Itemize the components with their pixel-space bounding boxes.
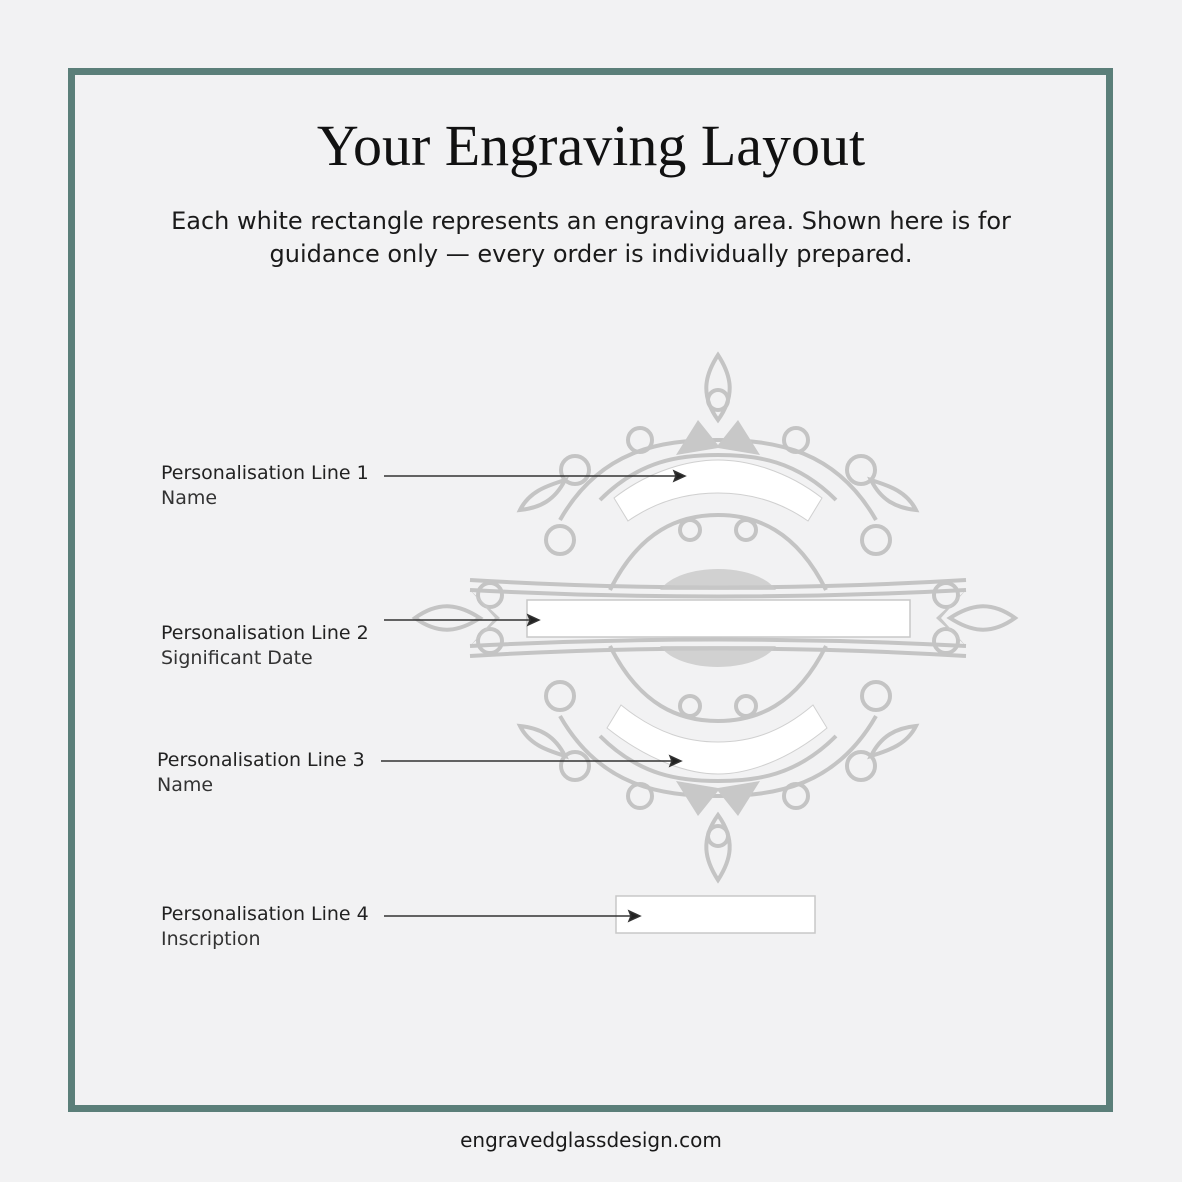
arrows	[381, 471, 685, 921]
engraving area 3 (bottom arc)	[607, 705, 827, 774]
label line 2: Personalisation Line 2	[161, 622, 369, 644]
label line 4	[161, 903, 369, 950]
engraving area 2 (middle bar)	[527, 600, 910, 637]
subtitle: Each white rectangle represents an engraving area. Shown here is for	[171, 207, 1011, 235]
subtitle: guidance only — every order is individually prepared.	[270, 240, 912, 268]
frame border	[68, 68, 1113, 1112]
engraving area 1 (top arc)	[614, 460, 822, 521]
engraving area 4 (inscription)	[616, 896, 815, 933]
label line 4: Inscription	[161, 928, 261, 950]
label line 2	[161, 622, 369, 669]
label line 2: Significant Date	[161, 647, 313, 669]
footer url: engravedglassdesign.com	[460, 1128, 722, 1152]
label line 1: Name	[161, 487, 217, 509]
label line 4: Personalisation Line 4	[161, 903, 369, 925]
label line 3: Personalisation Line 3	[157, 749, 365, 771]
title: Your Engraving Layout	[317, 113, 865, 178]
label line 3	[157, 749, 365, 796]
label line 1	[161, 462, 369, 509]
subtitle	[171, 207, 1011, 268]
label line 1: Personalisation Line 1	[161, 462, 369, 484]
label line 3: Name	[157, 774, 213, 796]
